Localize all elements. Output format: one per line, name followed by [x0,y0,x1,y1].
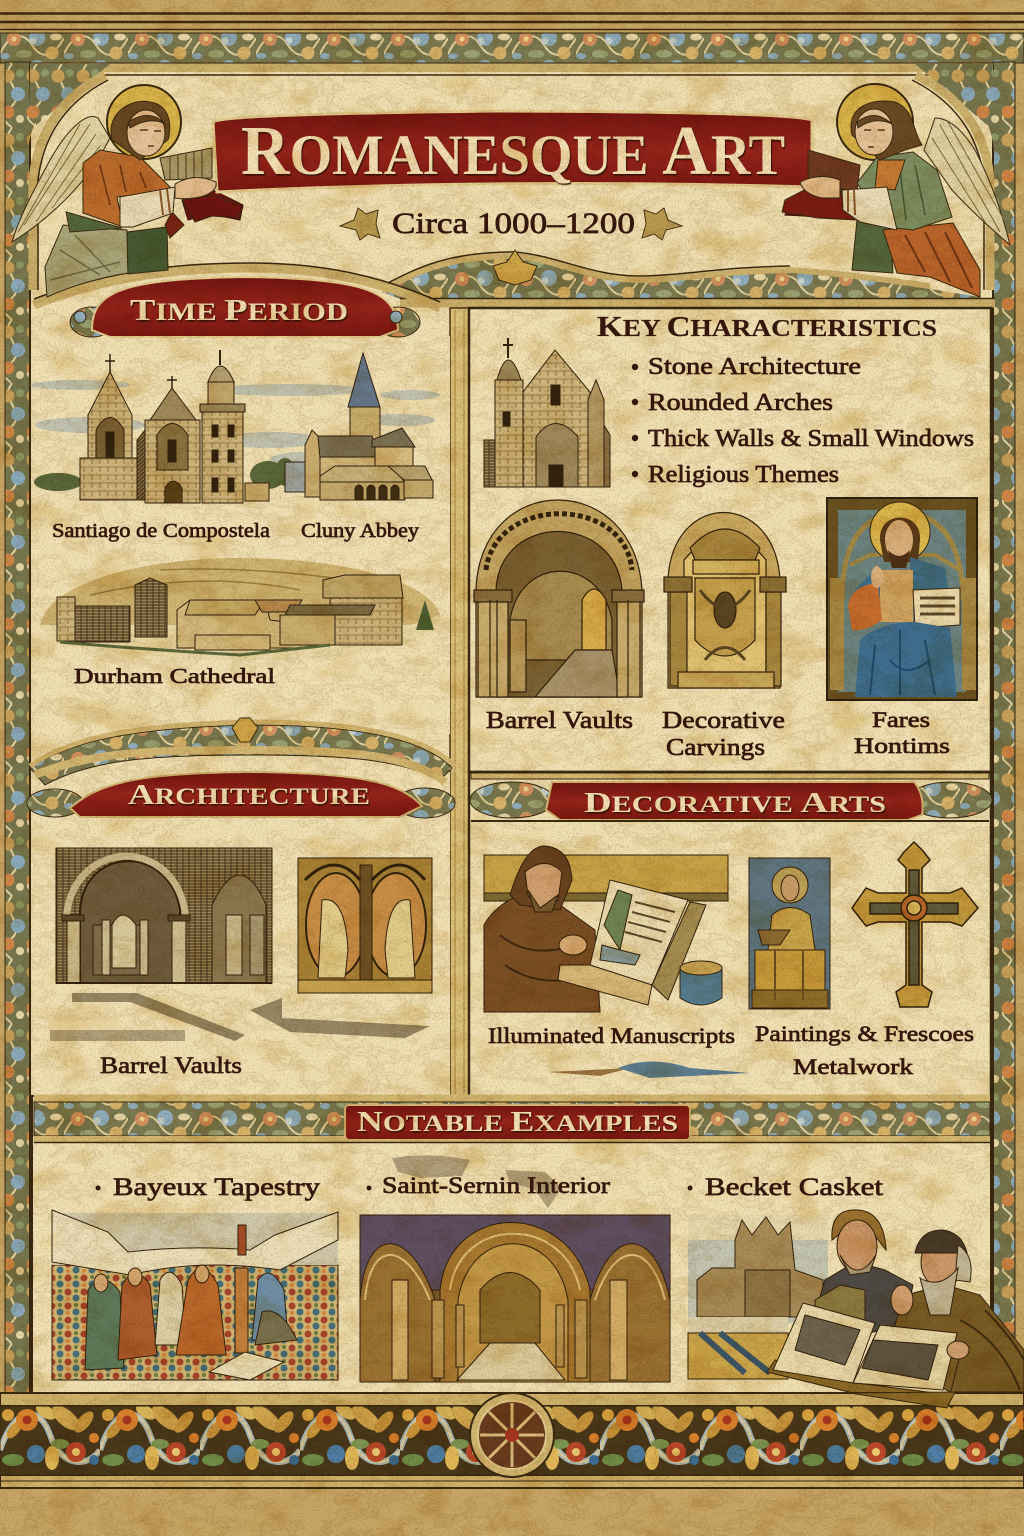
banner: time period [70,277,420,337]
scribe with manuscript [484,846,728,1012]
sleeve [120,187,175,227]
Santiago de Compostela building [80,350,269,503]
green mantle [857,152,952,230]
open book [767,1347,962,1407]
caption Illuminated Manuscripts: Illuminated Manuscripts [488,1023,735,1048]
heading: KEY CHARACTERISTICS [597,311,937,343]
banner [345,1105,690,1140]
ornamental band: architecture [30,718,455,785]
orange lower robe [883,223,980,297]
robe lower [45,225,128,297]
head and hair [851,101,922,160]
torn parchment patches [392,1155,562,1208]
title: ROMANESQUE ART [241,113,785,190]
church illustration [484,338,610,487]
right floral border band [993,62,1015,1394]
caption Metalwork: Metalwork [793,1054,913,1079]
label Durham: Durham Cathedral [74,664,275,688]
ornamental band [34,1098,990,1142]
decorative carving illustration [664,512,786,688]
halo [837,84,913,160]
pen smudge [548,1062,750,1078]
heading: TIME PERIOD [130,292,348,327]
left floral border band [5,62,30,1394]
caption Paintings & Frescoes: Paintings & Frescoes [755,1021,974,1046]
red ribbon fold [782,186,855,220]
hand [175,177,216,199]
Becket cathedral and scholars illustration [688,1210,1024,1407]
upper-left arch over time period [34,263,440,308]
item Bayeux Tapestry: Bayeux Tapestry [113,1174,321,1201]
caption Barrel Vaults: Barrel Vaults [486,708,633,734]
Saint-Sernin illustration [360,1215,670,1382]
bullet list: Religious Themes [648,462,839,488]
heading: NOTABLE EXAMPLES [357,1107,678,1138]
panel: key characteristics [469,308,991,772]
caption Decorative Carvings: Carvings [666,735,765,761]
heading: ARCHITECTURE [128,779,370,811]
top border rules [0,14,1024,30]
label Cluny: Cluny Abbey [301,520,419,542]
stone arcade illustration [56,848,272,983]
red under robe [165,212,184,238]
bottom floral border [0,1406,1024,1475]
book lower edge over moulding [850,1392,955,1408]
pleated ribbon [808,150,860,192]
caption Fares Hontims: Fares [872,707,930,732]
halo [107,85,181,159]
item Saint-Sernin Interior: Saint-Sernin Interior [382,1173,610,1198]
green lower robe [852,220,893,273]
bullet list: Thick Walls & Small Windows [648,426,974,452]
sleeve [842,187,897,230]
upper frame strip and corner arches [28,64,994,290]
caption Decorative Carvings [662,708,785,761]
caption Fares Hontims: Hontims [854,733,950,758]
central medallion [470,1393,554,1477]
sky streaks [30,380,440,468]
head and hair [111,101,170,160]
right angel [782,84,1010,297]
central gold column [450,308,469,1098]
Christ enthroned panel [827,498,977,700]
monk left [813,1262,913,1335]
bottom gold moulding [0,1393,1024,1488]
title ribbon [182,111,845,220]
green robe [127,227,168,274]
ornate cross [852,842,978,1007]
wing [924,118,1010,245]
tapestry illustration [52,1210,338,1380]
Cluny Abbey building [285,353,433,500]
caption Fares Hontims [854,707,950,758]
subtitle date: Circa 1000–1200 [392,207,635,240]
scene: Durham [40,558,440,660]
bullet list: Stone Architecture [648,354,861,380]
barrel vault illustration [474,500,644,697]
pleated ribbon [160,148,212,180]
small painting [749,858,830,1009]
caption Decorative Carvings: Decorative [662,708,785,734]
subtitle date [340,207,682,240]
panel: notable examples [32,1096,1024,1407]
red ribbon fold [182,195,243,222]
monk right [890,1285,1024,1392]
top floral border band [0,33,1024,63]
heading: D ECORATIVE A RTS [584,787,886,819]
bullet list: Rounded Arches [648,390,833,416]
panel: decorative arts [469,772,991,1096]
banner: architecture [27,772,455,818]
hand [800,176,840,198]
item Becket Casket: Becket Casket [705,1174,883,1201]
tunic orange [875,160,905,190]
banner: decorative arts [470,773,992,821]
label Santiago: Santiago de Compostela [52,520,270,542]
trees [34,458,295,491]
caption: Barrel Vaults [100,1053,242,1078]
wing [12,117,110,242]
panel: architecture [34,772,450,1096]
panel: time period [30,336,450,734]
bullet list [632,354,974,488]
carved relief illustration [298,858,432,993]
orange mantle [83,150,173,227]
ground smudges [50,993,430,1041]
left angel [12,85,243,297]
upper floral swoop band [382,250,995,303]
